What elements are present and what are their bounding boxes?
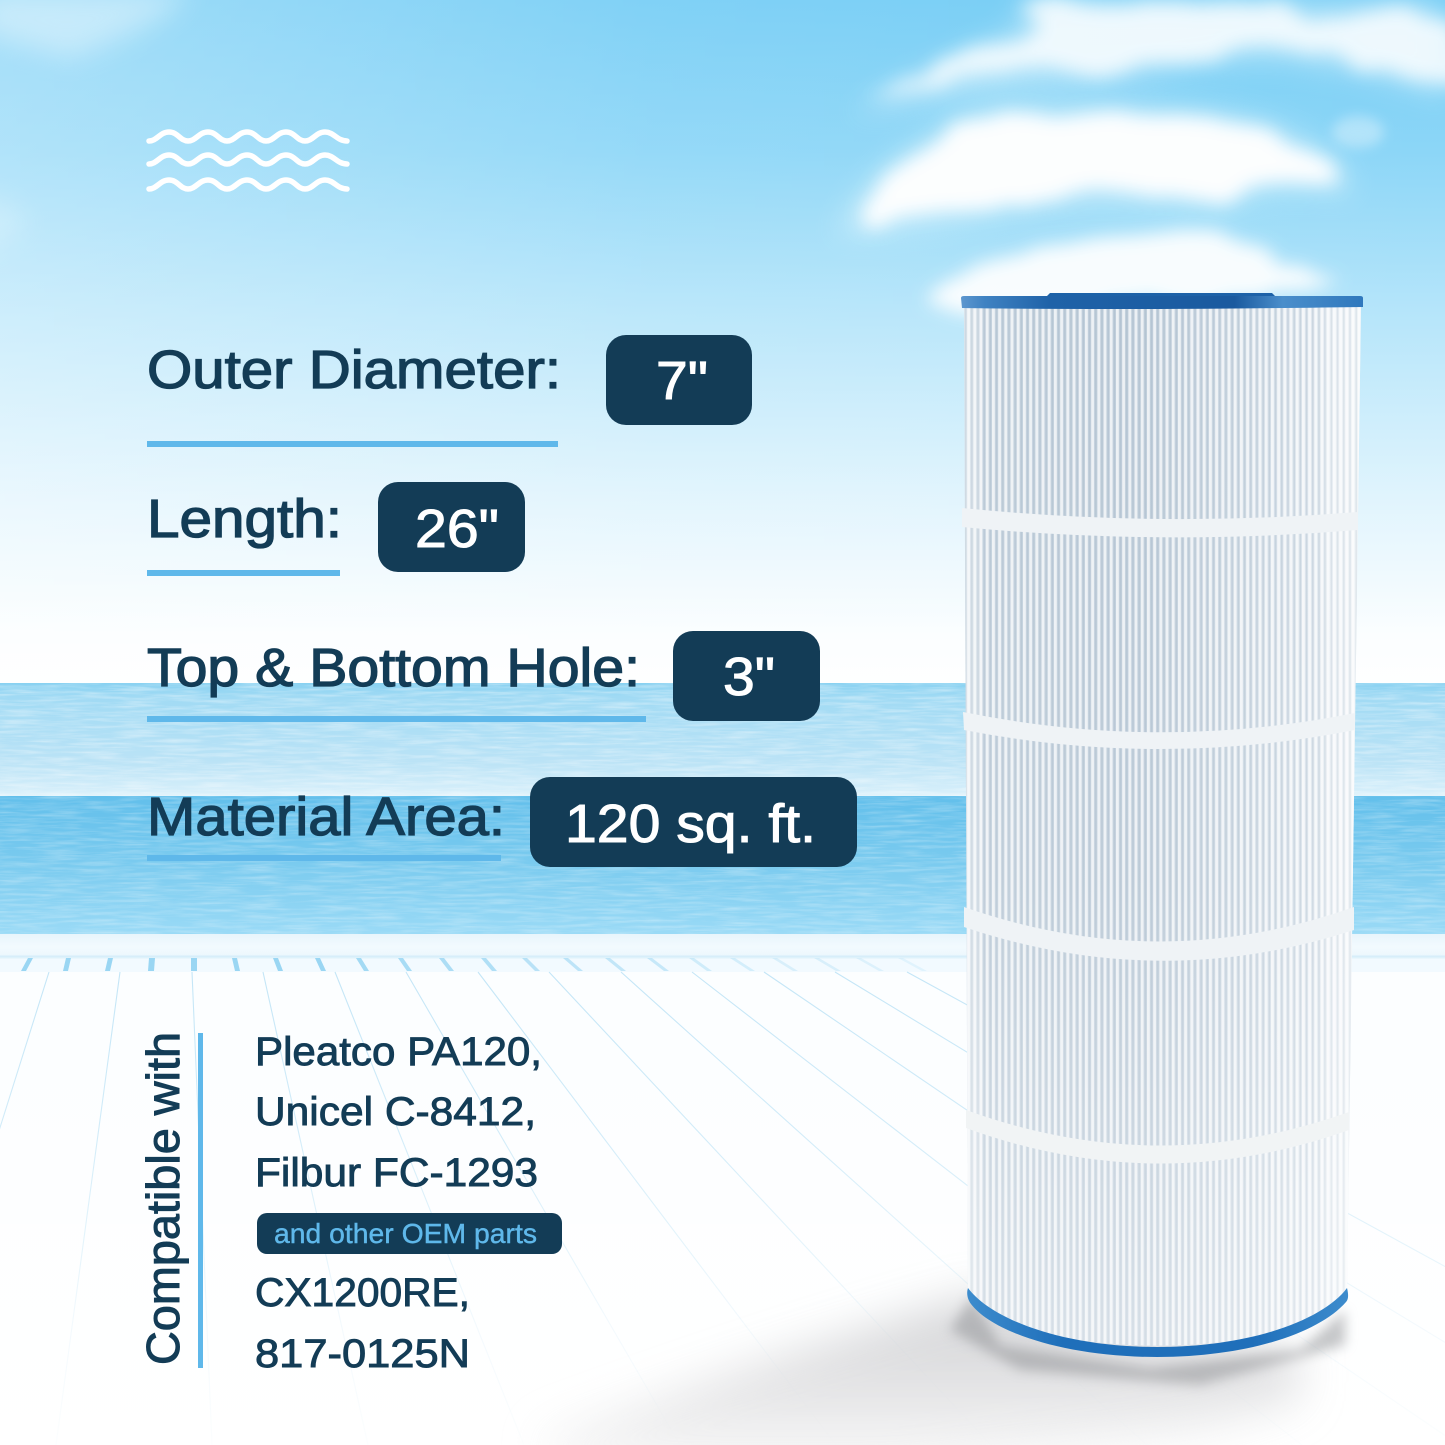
value pill: 7 inches: 7"	[656, 351, 708, 411]
compatible with heading: Compatible with	[137, 1032, 189, 1365]
value pill: 120 sq. ft.: 120 sq. ft.	[565, 794, 816, 854]
filter pleated body	[960, 300, 1365, 1360]
compatible parts list	[255, 1030, 562, 1376]
value pill: 120 sq. ft.	[530, 777, 857, 867]
compatibility block	[137, 1030, 562, 1376]
compatible parts list: and other OEM parts	[274, 1218, 537, 1249]
value pill: 7 inches	[606, 335, 752, 425]
compatible parts list: Pleatco PA120,	[255, 1030, 542, 1074]
background: pool ledge	[0, 934, 1445, 959]
spec: material area	[147, 777, 857, 867]
compatible parts list: 817-0125N	[255, 1332, 470, 1376]
compatible parts list: Unicel C-8412,	[255, 1090, 536, 1134]
filter band 3	[964, 907, 1354, 961]
spec: top and bottom hole	[147, 631, 820, 722]
product: pool filter cartridge	[960, 293, 1365, 1360]
compatible parts list: CX1200RE,	[255, 1271, 470, 1315]
label: outer diameter: Outer Diameter:	[147, 340, 561, 400]
background: pool water	[0, 796, 1445, 934]
value pill: 26 inches: 26"	[415, 499, 499, 559]
filter band 2	[963, 712, 1355, 749]
filter bottom rim	[967, 1288, 1348, 1357]
filter top cap	[961, 293, 1363, 309]
spec: outer diameter	[147, 335, 752, 447]
label: length: Length:	[147, 489, 342, 549]
background: sea	[0, 683, 1445, 796]
label: top and bottom hole: Top & Bottom Hole:	[147, 638, 640, 698]
filter band 1	[962, 508, 1358, 537]
value pill: 3 inches	[673, 631, 820, 721]
wave icon	[149, 132, 347, 189]
background: sky	[0, 0, 1445, 690]
filter band 4	[966, 1110, 1349, 1164]
background: deck	[0, 958, 1445, 1445]
compatible parts list: Filbur FC-1293	[255, 1151, 538, 1195]
label: material area: Material Area:	[147, 787, 505, 847]
value pill: 26 inches	[378, 482, 525, 572]
spec: length	[147, 482, 525, 576]
filter shadow	[540, 1296, 1345, 1445]
clouds	[0, 0, 1445, 312]
value pill: 3 inches: 3"	[723, 647, 775, 707]
